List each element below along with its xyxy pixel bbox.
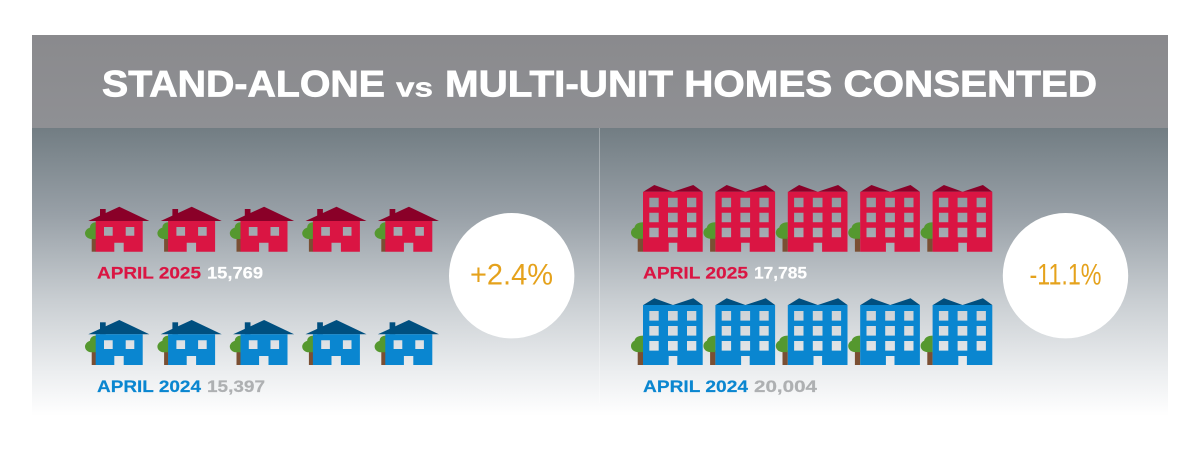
label: April 2024 multi-unit: APRIL 2024 <box>643 377 749 396</box>
label: April 2024 multi-unit <box>643 377 818 396</box>
label: April 2025 stand-alone: 15,769 <box>207 264 263 282</box>
label: April 2025 multi-unit <box>643 264 807 282</box>
callout: +2.4%: +2.4% <box>470 258 553 292</box>
icons: blue apartment buildings, April 2024 <box>631 298 992 365</box>
callout: +2.4% <box>449 213 574 338</box>
label: April 2024 multi-unit: 20,004 <box>754 377 818 396</box>
label: April 2024 stand-alone: 15,397 <box>207 377 265 396</box>
panel: multi-unit homes <box>631 185 1128 396</box>
panel: gradient background <box>32 128 1168 416</box>
icons: blue houses, April 2024 <box>85 320 439 365</box>
label: April 2024 stand-alone <box>97 377 265 396</box>
label: April 2024 stand-alone: APRIL 2024 <box>97 377 202 396</box>
title banner: vs <box>396 72 433 102</box>
icons: red apartment buildings, April 2025 <box>631 185 992 252</box>
panel: stand-alone homes <box>85 207 574 396</box>
title banner: MULTI-UNIT HOMES CONSENTED <box>445 64 1097 104</box>
title banner: STAND-ALONE <box>102 64 385 104</box>
title banner <box>32 35 1168 128</box>
callout: -11.1% <box>1003 213 1128 338</box>
label: April 2025 stand-alone: APRIL 2025 <box>97 264 201 282</box>
label: April 2025 stand-alone <box>97 264 263 282</box>
icons: red houses, April 2025 <box>85 207 439 252</box>
label: April 2025 multi-unit: APRIL 2025 <box>643 264 748 282</box>
callout: -11.1%: -11.1% <box>1030 258 1102 292</box>
label: April 2025 multi-unit: 17,785 <box>754 264 807 282</box>
